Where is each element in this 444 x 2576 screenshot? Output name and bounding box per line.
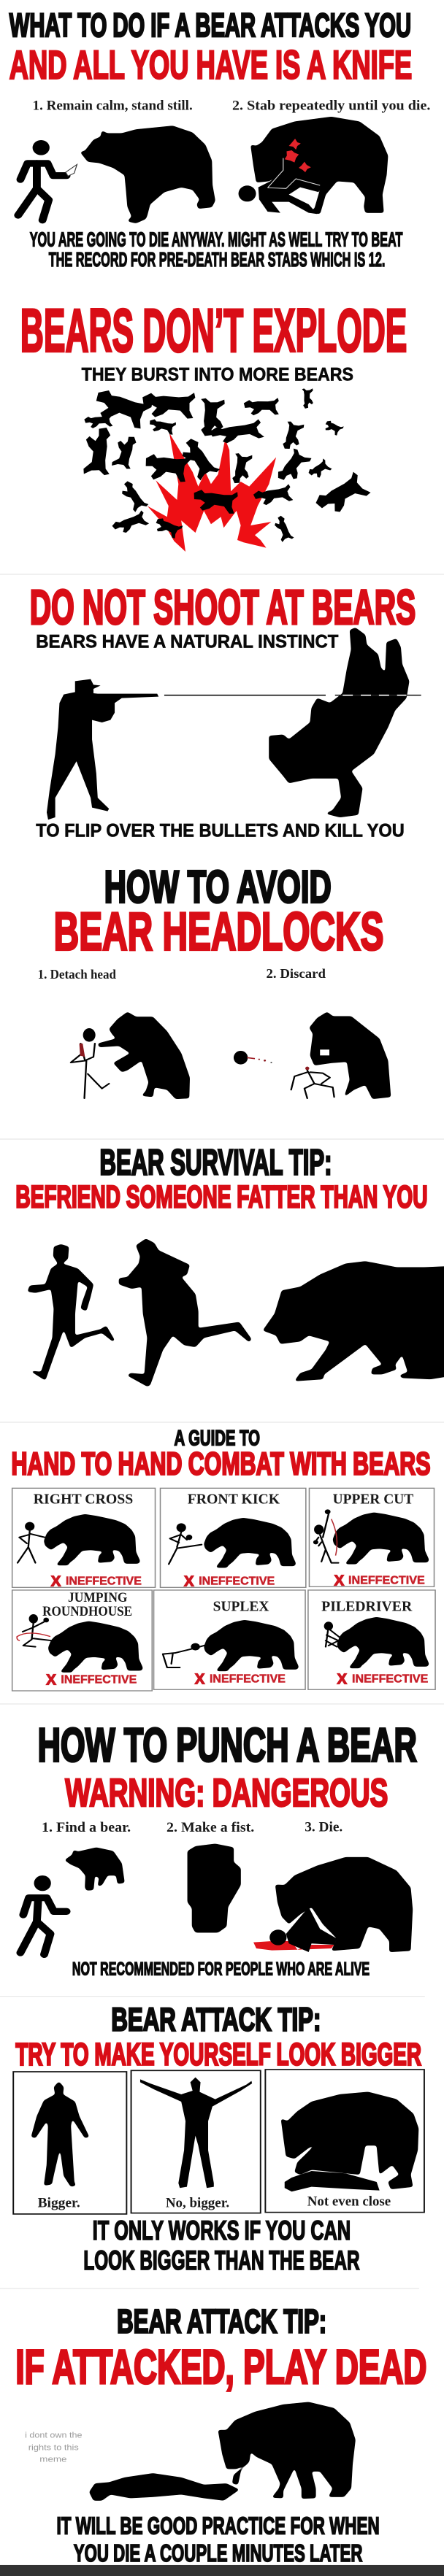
card: no, bigger (131, 2070, 261, 2213)
text: top line: BEARS HAVE A NATURAL INSTINCT (36, 631, 339, 652)
card: upper cut: INEFFECTIVE (348, 1574, 425, 1586)
icon: small bear (64, 1848, 125, 1891)
card: front kick (160, 1488, 306, 1589)
card: jumping roundhouse: INEFFECTIVE (61, 1673, 137, 1686)
note: disclaimer (25, 2431, 83, 2464)
card: bigger (13, 2072, 126, 2214)
panel: bears don't explode (0, 297, 444, 574)
card: jumping roundhouse: ROUNDHOUSE (42, 1604, 132, 1619)
card: front kick: FRONT KICK (188, 1491, 280, 1507)
card: jumping roundhouse: X (46, 1671, 56, 1688)
step 1 label: 1. Find a bear. (42, 1820, 131, 1835)
icon: thrown head (234, 1051, 272, 1065)
panel: how to punch a bear (20, 1719, 417, 1954)
card: not even close: Not even close (307, 2193, 391, 2209)
step 2 label: 2. Stab repeatedly until you die. (232, 99, 430, 113)
card: suplex: X (195, 1670, 204, 1687)
card: suplex: INEFFECTIVE (210, 1673, 286, 1685)
card: suplex (154, 1590, 305, 1689)
icon: bear grabbing (98, 1012, 190, 1099)
icon: stick man (20, 1875, 66, 1954)
card: piledriver (308, 1590, 435, 1689)
card: right cross: INEFFECTIVE (66, 1575, 142, 1587)
step 1 label: 1. Remain calm, stand still. (33, 99, 193, 113)
card: suplex: SUPLEX (213, 1598, 269, 1614)
icon: headless stick man (291, 1067, 334, 1098)
card: right cross: RIGHT CROSS (34, 1491, 133, 1507)
icon: shooter (47, 679, 158, 820)
card: not even close (265, 2070, 424, 2213)
heading small: A GUIDE TO (174, 1426, 260, 1450)
step 3 label: 3. Die. (305, 1820, 342, 1835)
card: right cross (12, 1488, 156, 1589)
icon: bear standing (80, 126, 215, 223)
step 1 label: 1. Detach head (38, 968, 116, 982)
icon: bear over victim (269, 1857, 413, 1952)
panel: look bigger (0, 1959, 425, 2275)
card: jumping roundhouse: JUMPING (68, 1590, 128, 1605)
card: piledriver: INEFFECTIVE (352, 1673, 428, 1685)
icon: bear sniffing (218, 2402, 356, 2499)
icon: bear with hole (309, 1012, 391, 1099)
icon: lying man (89, 2473, 240, 2501)
icon: fist (188, 1844, 241, 1932)
card: front kick: INEFFECTIVE (199, 1575, 275, 1587)
note: disclaimer: meme (39, 2454, 67, 2464)
card: upper cut: X (334, 1572, 344, 1589)
panel: hand to hand combat (0, 1446, 444, 1704)
footer bar (0, 2565, 444, 2576)
panel: knife attack (9, 7, 430, 271)
card: bigger: Bigger. (38, 2194, 80, 2210)
card: upper cut: UPPER CUT (333, 1491, 414, 1507)
icon: stick man holding head (71, 1028, 109, 1098)
panel: play dead (0, 2288, 444, 2576)
note: disclaimer: rights to this (28, 2442, 79, 2452)
card: jumping roundhouse (12, 1590, 152, 1691)
card: no, bigger: No, bigger. (166, 2194, 229, 2210)
icon: fat runner (119, 1238, 251, 1387)
step 2 label: 2. Make a fist. (166, 1820, 254, 1835)
icon: blood pool (253, 1941, 334, 1951)
step 2 label: 2. Discard (267, 967, 326, 982)
panel: befriend someone fatter (0, 1143, 444, 1450)
icon: stick man with knife (18, 140, 77, 220)
card: front kick: X (184, 1573, 194, 1589)
card: piledriver: PILEDRIVER (321, 1598, 413, 1614)
panel: do not shoot at bears (30, 581, 421, 841)
icon: flying bears (79, 380, 373, 543)
card: upper cut (309, 1488, 434, 1589)
icon: chasing bear (263, 1261, 444, 1381)
card: piledriver: X (337, 1670, 347, 1687)
subtitle: THEY BURST INTO MORE BEARS (82, 364, 353, 385)
icon: bear with stabs (239, 117, 388, 214)
icon: red explosion (148, 433, 276, 552)
panel: bear headlocks (0, 862, 444, 1139)
note: disclaimer: i dont own the (25, 2431, 83, 2440)
icon: thin runner (28, 1244, 115, 1381)
card: right cross: X (51, 1573, 61, 1589)
bullet path (164, 693, 421, 697)
icon: flipping bear (269, 628, 409, 817)
